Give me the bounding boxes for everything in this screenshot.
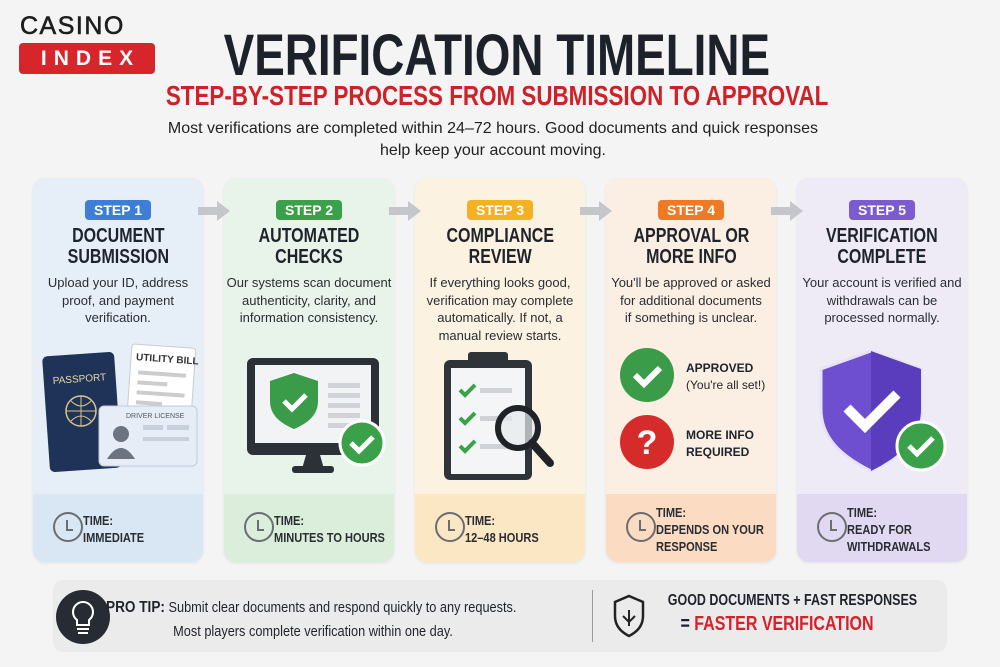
panel: step 1: STEP 1 <box>94 202 142 218</box>
panel: step 1 <box>33 178 203 562</box>
panel: step 3: STEP 3 <box>476 202 524 218</box>
panel: step 5 <box>797 178 967 562</box>
panel: step 1: verification. <box>85 310 151 325</box>
panel: step 5: STEP 5 <box>858 202 906 218</box>
panel: step 4 <box>606 178 776 562</box>
icon: approved: (You're all set!) <box>686 378 765 392</box>
panel: step 4: You'll be approved or asked <box>611 275 771 290</box>
panel: step 2 <box>224 178 394 562</box>
panel: step 2: MINUTES TO HOURS <box>274 530 385 545</box>
panel: step 3: 12–48 HOURS <box>465 530 539 545</box>
title: VERIFICATION TIMELINE <box>224 23 770 88</box>
panel: step 3: TIME: <box>465 513 495 528</box>
panel: step 4: APPROVAL OR <box>633 225 749 247</box>
panel: step 5: processed normally. <box>824 310 940 325</box>
panel: step 1: Upload your ID, address <box>48 275 188 290</box>
icon: clipboard with magnifier <box>444 352 554 480</box>
intro text <box>168 120 818 159</box>
panel: step 5: TIME: <box>847 505 877 520</box>
logo: CASINO <box>20 12 125 40</box>
panel: step 2: AUTOMATED <box>259 225 359 247</box>
subtitle: STEP-BY-STEP PROCESS FROM SUBMISSION TO APPROVAL <box>166 80 828 111</box>
panel: step 1: IMMEDIATE <box>83 530 144 545</box>
text: pro tip: Most players complete verification within one day. <box>173 623 453 640</box>
panel: step 4: for additional documents <box>620 292 762 308</box>
icon: more info: REQUIRED <box>686 445 749 459</box>
icon: approved: APPROVED <box>686 361 753 375</box>
panel: step 2: Our systems scan document <box>227 275 391 290</box>
icon: documents: DRIVER LICENSE <box>126 413 185 420</box>
panel: step 4: if something is unclear. <box>625 310 757 325</box>
logo <box>19 12 155 74</box>
panel: step 2: information consistency. <box>240 310 378 325</box>
panel: step 5: COMPLETE <box>838 246 926 268</box>
icon: documents: PASSPORT <box>52 372 107 387</box>
panel: step 2: STEP 2 <box>285 202 333 218</box>
logo: INDEX <box>41 47 140 70</box>
panel: step 3: manual review starts. <box>439 328 561 342</box>
panel: step 2: authenticity, clarity, and <box>242 292 376 308</box>
intro text: help keep your account moving. <box>380 142 606 159</box>
panel: step 4: RESPONSE <box>656 539 717 554</box>
panel: step 4: DEPENDS ON YOUR <box>656 522 764 537</box>
panel: step 1: TIME: <box>83 513 113 528</box>
icon: approved <box>620 348 765 402</box>
panel: step 3: verification may complete <box>427 292 573 308</box>
panel: step 3: If everything looks good, <box>430 275 570 290</box>
panel: step 1: SUBMISSION <box>67 246 169 268</box>
panel: step 3: automatically. If not, a <box>437 310 563 325</box>
panel: step 4: STEP 4 <box>667 202 715 218</box>
panel: step 1: proof, and payment <box>62 292 174 308</box>
panel: step 1: DOCUMENT <box>72 225 164 247</box>
panel: step 3: REVIEW <box>468 246 532 268</box>
panel: pro tip bar <box>53 580 947 652</box>
text: formula: GOOD DOCUMENTS + FAST RESPONSES <box>668 592 917 609</box>
icon: documents <box>42 344 199 472</box>
panel: step 3: COMPLIANCE <box>446 225 554 247</box>
panel: step 4: MORE INFO <box>646 246 736 268</box>
icon: more info: MORE INFO <box>686 428 754 442</box>
text: formula <box>668 592 917 635</box>
icon: shield outline <box>614 594 644 638</box>
panel: step 2: CHECKS <box>275 246 343 268</box>
panel: step 3 <box>415 178 585 562</box>
panel: step 2: TIME: <box>274 513 304 528</box>
icon: more info <box>620 415 754 469</box>
panel: step 4: TIME: <box>656 505 686 520</box>
text: formula: = FASTER VERIFICATION <box>680 613 874 635</box>
icon: lightbulb <box>56 590 110 644</box>
panel: step 5: WITHDRAWALS <box>847 539 930 554</box>
intro text: Most verifications are completed within 24–72 hours. Good documents and quick responses <box>168 120 818 137</box>
icon: monitor with shield <box>247 358 386 473</box>
text: pro tip: PRO TIP: Submit clear documents and respond quickly to any requests. <box>106 599 516 616</box>
icon: purple shield <box>820 350 946 472</box>
text: pro tip <box>106 599 516 640</box>
panel: step 5: withdrawals can be <box>827 292 937 308</box>
icon: documents: UTILITY BILL <box>136 352 199 368</box>
icon: more info: ? <box>637 424 657 462</box>
panel: step 5: VERIFICATION <box>826 225 938 247</box>
panel: step 5: READY FOR <box>847 522 912 537</box>
panel: step 5: Your account is verified and <box>802 275 962 290</box>
